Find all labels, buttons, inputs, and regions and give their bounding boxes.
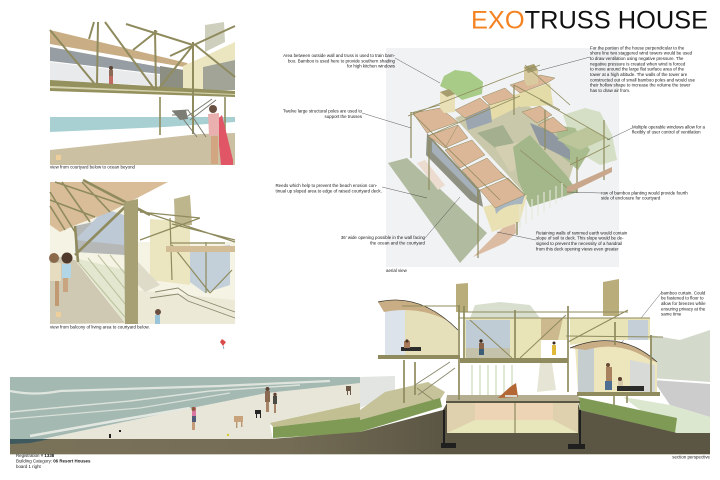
callout: bamboo curtain: same time (661, 312, 682, 317)
callout: wind towers: their hollow shape to increase the volume the tower (590, 83, 691, 88)
left background behind section (360, 376, 395, 408)
right upper wall (570, 318, 650, 345)
caption: aerial view: aerial view (386, 268, 408, 273)
callout: retaining walls: slope of soil to deck. This slope would be de- (536, 236, 624, 241)
callout: bamboo training: Area between outside wall and truss is used to train bam- (283, 53, 396, 58)
callout: wind towers: constructed out of small bamboo poles and would use (590, 77, 696, 82)
registration block: Registration # 1338 (16, 453, 55, 458)
registration block: Building Category: 06 Resort Houses (16, 459, 91, 464)
glazed rear wall (187, 245, 230, 293)
callout: retaining walls (536, 230, 628, 251)
panel: aerial view (386, 48, 619, 267)
people in section (401, 339, 644, 398)
right background: trees, road and lawn (650, 330, 710, 382)
reeds right (578, 397, 677, 433)
callout: wide opening: the ocean and the courtyard (370, 240, 426, 245)
left living room (385, 302, 458, 355)
foundations (441, 410, 585, 449)
panel: view from balcony of living area (49, 180, 235, 324)
callout: retaining walls: signed to prevent the necessity of a handrail (536, 241, 622, 246)
title: EXOTRUSS HOUSE (471, 6, 708, 34)
callout: wind towers: to move around the large flat surface area of the (590, 67, 685, 72)
balcony floor (50, 255, 125, 324)
callout: wind towers (590, 45, 696, 93)
registration block (16, 453, 91, 469)
background tree (470, 302, 540, 318)
callout: wind towers: shore line two staggered wind towers would be used (590, 51, 693, 56)
callout: wind towers: to draw ventilation using negative pressure. The (590, 56, 684, 61)
callout: operable windows (632, 124, 706, 135)
truss members (50, 22, 235, 135)
sand (43, 383, 360, 440)
wind towers (440, 64, 538, 113)
decks (378, 355, 660, 396)
pink retaining wall (473, 218, 516, 257)
sea (50, 117, 235, 132)
icon: kite (220, 339, 226, 349)
two children (49, 252, 72, 306)
callout: bamboo curtain: ensuring privacy at the (661, 306, 706, 311)
figure in courtyard (155, 309, 161, 324)
callout: bamboo row: side of enclosure for courtyard (601, 196, 661, 201)
figure on deck (109, 66, 113, 84)
callout: reeds (276, 183, 382, 193)
callout: operable windows: Multiple operable windows allow for a (632, 124, 706, 129)
callout: wind towers: negative pressure is created when wind is forced (590, 61, 686, 66)
sea (10, 377, 360, 440)
callout: wide opening: 36' wide opening possible in the wall facing (341, 235, 426, 240)
girl with red towel (208, 105, 233, 165)
callout: structural poles (283, 109, 363, 119)
warm beige wrap (166, 246, 235, 252)
callout: reeds: tinual up sloped area to edge of raised courtyard deck. (276, 188, 382, 193)
reeds left, beach part (270, 403, 360, 427)
callout: structural poles: support the trusses (325, 114, 363, 119)
bamboo fence (520, 183, 562, 228)
right deck support (614, 396, 627, 405)
panel: beach and section perspective (10, 279, 710, 455)
callout: bamboo training: for high kitchen windows (347, 64, 396, 69)
callout: bamboo curtain (661, 290, 706, 317)
central building (465, 318, 567, 358)
wing walls and glazing (426, 133, 483, 207)
callout: bamboo curtain: be fastened to floor to (661, 296, 704, 301)
roof panels (413, 75, 568, 208)
callout: structural poles: Twelve large structural poles are used to (283, 109, 363, 114)
roof strip (50, 30, 190, 68)
small icon (56, 155, 61, 160)
callout: retaining walls: Retaining walls of rammed earth would contain (536, 230, 628, 235)
callout: wind towers: tower at a high altitude. The walls of the tower are (590, 72, 688, 77)
callout: retaining walls: from this deck opening views even greater (536, 246, 619, 251)
bamboo in courtyard (472, 365, 512, 395)
deck (50, 80, 235, 97)
courtyard floor (50, 133, 235, 165)
chimney (205, 22, 225, 52)
registration block: board 1 right (16, 464, 42, 469)
callout: bamboo curtain: bamboo curtain. Could (661, 290, 706, 295)
large foreground column (124, 199, 138, 324)
green trellis roof (557, 127, 607, 150)
callout: wide opening (341, 235, 426, 245)
stair to court (537, 363, 556, 392)
chimneys (456, 279, 619, 316)
stair (138, 262, 160, 292)
structural poles (408, 65, 610, 258)
building core and courtyard (455, 95, 575, 200)
callout: operable windows: flexibly of user control of ventilation (632, 130, 701, 135)
section truss (402, 305, 663, 433)
pale bamboo trees at right (563, 108, 617, 165)
right bedroom (575, 341, 657, 392)
beach figures (109, 386, 351, 438)
callout: bamboo curtain: allow for breezes while (661, 301, 706, 306)
callout: wind towers: has to draw air from. (590, 88, 630, 93)
ground section (10, 403, 710, 454)
callout: reeds: Reeds which help to prevent the beach erosion con- (276, 183, 378, 188)
annotation leaders (362, 57, 661, 347)
reeds ground (388, 158, 487, 263)
basement room (447, 403, 578, 420)
callout: bamboo training: boo. Bamboo is used here to provide southern shading (288, 58, 396, 63)
caption: section perspective: section perspective (672, 454, 711, 460)
small icon (56, 312, 61, 317)
roof lattice (50, 182, 168, 232)
reeds left, section part (360, 382, 445, 420)
court deck slab (446, 395, 580, 401)
caption: view one: view from courtyard below to ocean beyond (50, 164, 136, 170)
panel: view from courtyard to ocean (50, 22, 235, 165)
callout: bamboo row (601, 190, 688, 201)
pale pink embankment (417, 160, 445, 190)
callout: wind towers: For the portion of the house perpendicular to the (590, 45, 685, 50)
tree top (440, 70, 483, 100)
caption: view two: view from balcony of living area to courtyard below. (50, 324, 150, 330)
callout: bamboo training (283, 53, 396, 69)
stair (172, 99, 216, 137)
callout: bamboo row: row of bamboo planting would provide fourth (601, 190, 688, 195)
